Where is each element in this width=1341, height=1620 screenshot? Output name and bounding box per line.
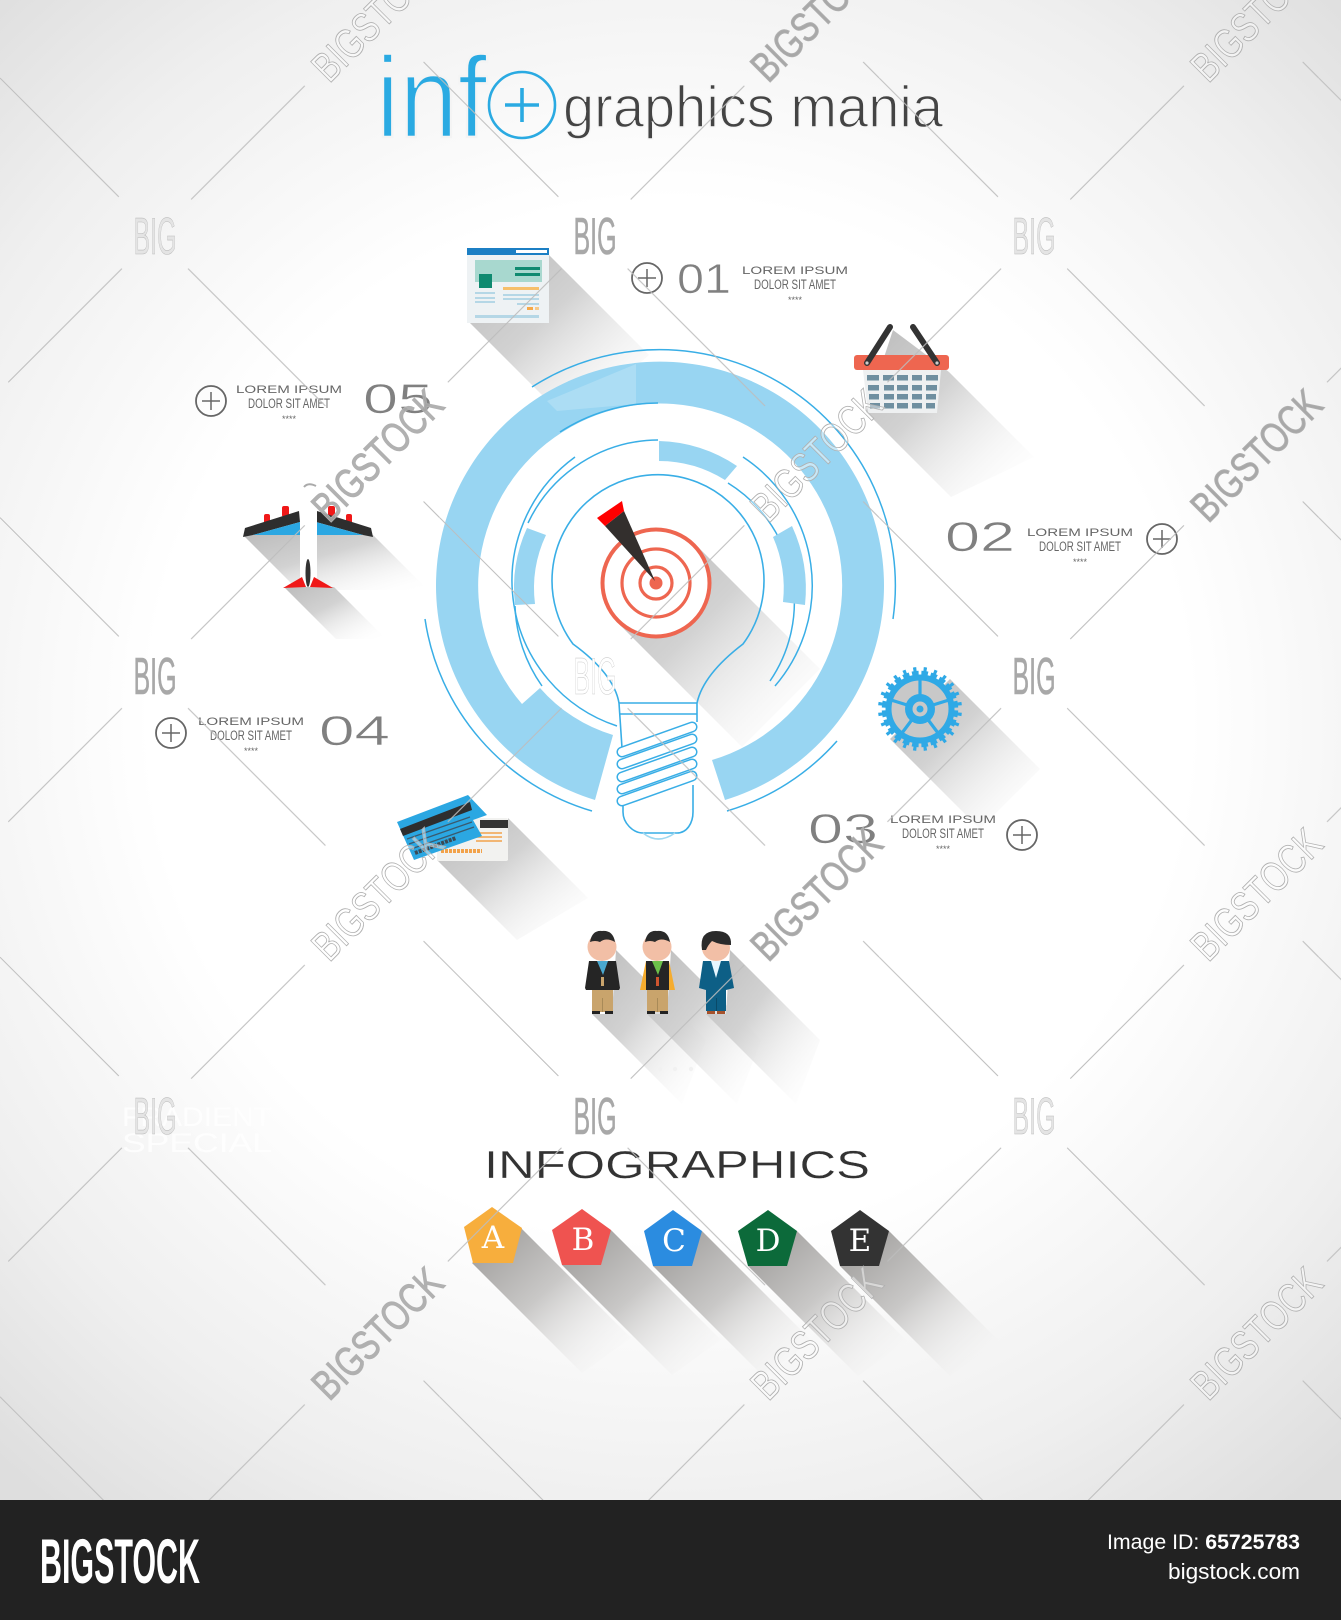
plus icon 03 <box>1007 820 1037 850</box>
watermark: BIGSTOCK diagonals <box>302 0 1331 1408</box>
caption 02: **** <box>1073 557 1087 567</box>
caption 05: **** <box>282 414 296 424</box>
badge D <box>738 1210 797 1266</box>
icon: gear <box>880 670 960 748</box>
title words: graphics mania: graphics mania <box>563 75 944 140</box>
faint white background text <box>122 1102 272 1158</box>
ring highlight <box>547 364 636 411</box>
central ring and bulb diagram <box>425 350 895 839</box>
badge C <box>644 1210 702 1266</box>
number 03: 03 <box>808 805 878 852</box>
fuselage <box>300 495 317 587</box>
watermark: BIG labels: BIG <box>574 208 616 266</box>
caption 02: DOLOR SIT AMET <box>1039 539 1121 554</box>
faint white background text: SPECIAL <box>122 1128 272 1158</box>
man 1 <box>585 931 620 1014</box>
watermark: BIGSTOCK diagonals: BIGSTOCK <box>741 819 891 969</box>
pentagon badges A to E <box>464 1207 889 1266</box>
heading: INFOGRAPHICS: INFOGRAPHICS <box>484 1144 870 1187</box>
engines <box>264 506 352 524</box>
item 05 <box>196 375 433 424</box>
icon: airplane <box>243 484 373 588</box>
badge E <box>831 1210 889 1266</box>
caption 01: LOREM IPSUM <box>742 265 848 277</box>
icon: three businessmen <box>585 931 734 1014</box>
footer site: bigstock.com <box>1168 1559 1300 1584</box>
faint white background text: FRADIENT <box>122 1102 272 1132</box>
watermark: BIG labels: BIG <box>134 1088 176 1146</box>
man 2 <box>640 931 675 1014</box>
tailplane <box>283 577 306 588</box>
front card <box>397 795 487 860</box>
cockpit <box>304 484 316 487</box>
item 01 <box>632 255 848 305</box>
caption 04: **** <box>244 746 258 756</box>
back card <box>437 818 508 861</box>
watermark: BIG labels <box>134 208 1056 1146</box>
wings <box>243 511 300 537</box>
light bulb outline <box>552 475 764 839</box>
footer image id: Image ID: 65725783 <box>1107 1531 1300 1554</box>
watermark: BIG labels: BIG <box>574 648 616 706</box>
watermark: BIGSTOCK diagonals: BIGSTOCK <box>741 1258 891 1408</box>
plus icon 05 <box>196 386 226 416</box>
title word: inf: inf <box>376 34 488 162</box>
man 3 <box>699 931 734 1014</box>
caption 05: DOLOR SIT AMET <box>248 396 330 411</box>
caption 03: LOREM IPSUM <box>890 814 996 826</box>
plus icon 04 <box>156 718 186 748</box>
infographic canvas: BIG <box>1012 1088 1056 1146</box>
basket body <box>863 370 941 413</box>
plus icon 02 <box>1147 524 1177 554</box>
caption 04: DOLOR SIT AMET <box>210 728 292 743</box>
caption 04: LOREM IPSUM <box>198 716 304 728</box>
badge C: C <box>662 1223 686 1259</box>
basket tiles <box>867 375 938 408</box>
caption 05 <box>236 384 342 424</box>
infographic canvas: BIG <box>1012 648 1056 706</box>
bulb screw threads <box>622 727 692 801</box>
icon: shopping basket <box>854 327 949 413</box>
item 04 <box>156 707 390 756</box>
caption 01: DOLOR SIT AMET <box>754 277 836 292</box>
number 02: 02 <box>945 513 1015 560</box>
caption 05: LOREM IPSUM <box>236 384 342 396</box>
caption 01 <box>742 265 848 305</box>
icon: browser window <box>467 248 549 323</box>
title <box>376 34 944 162</box>
decorative dots <box>658 1067 693 1071</box>
footer bar <box>0 1500 1341 1620</box>
watermark: BIGSTOCK diagonals: BIGSTOCK <box>741 380 891 530</box>
plus icon 01 <box>632 263 662 293</box>
watermark: BIGSTOCK diagonals: BIGSTOCK <box>302 1258 452 1408</box>
light blue ring <box>436 362 884 800</box>
badge D: D <box>756 1223 780 1259</box>
footer bar: BIGSTOCK <box>40 1527 200 1597</box>
caption 02: LOREM IPSUM <box>1027 527 1133 539</box>
item 03 <box>808 805 1037 854</box>
icon: credit cards <box>397 795 508 861</box>
caption 03: DOLOR SIT AMET <box>902 826 984 841</box>
watermark: BIG labels: BIG <box>574 1088 616 1146</box>
caption 03: **** <box>936 844 950 854</box>
basket handles <box>865 327 939 365</box>
badge B: B <box>572 1222 594 1258</box>
number 05: 05 <box>363 375 433 422</box>
badge E: E <box>849 1223 871 1259</box>
tail fin <box>306 559 310 587</box>
watermark: BIG labels: BIG <box>134 208 176 266</box>
watermark: BIGSTOCK diagonals: BIGSTOCK <box>302 380 452 530</box>
number 04: 04 <box>319 707 390 754</box>
badge B <box>552 1209 611 1265</box>
long shadows <box>243 255 1040 1376</box>
number 01: 01 <box>677 255 731 302</box>
badge A: A <box>481 1220 505 1256</box>
caption 03 <box>890 814 996 854</box>
watermark: BIGSTOCK diagonals: BIGSTOCK <box>302 819 452 969</box>
badge A <box>464 1207 522 1263</box>
caption 04 <box>198 716 304 756</box>
caption 01: **** <box>788 295 802 305</box>
thin blue arcs <box>425 350 895 811</box>
watermark: BIG labels: BIG <box>134 648 176 706</box>
ring segments <box>514 441 806 605</box>
item 02 <box>945 513 1177 567</box>
title icon: circled plus <box>489 72 555 138</box>
target with dart <box>597 501 710 636</box>
caption 02 <box>1027 527 1133 567</box>
basket band <box>854 355 949 370</box>
infographic canvas: BIG <box>1012 208 1056 266</box>
